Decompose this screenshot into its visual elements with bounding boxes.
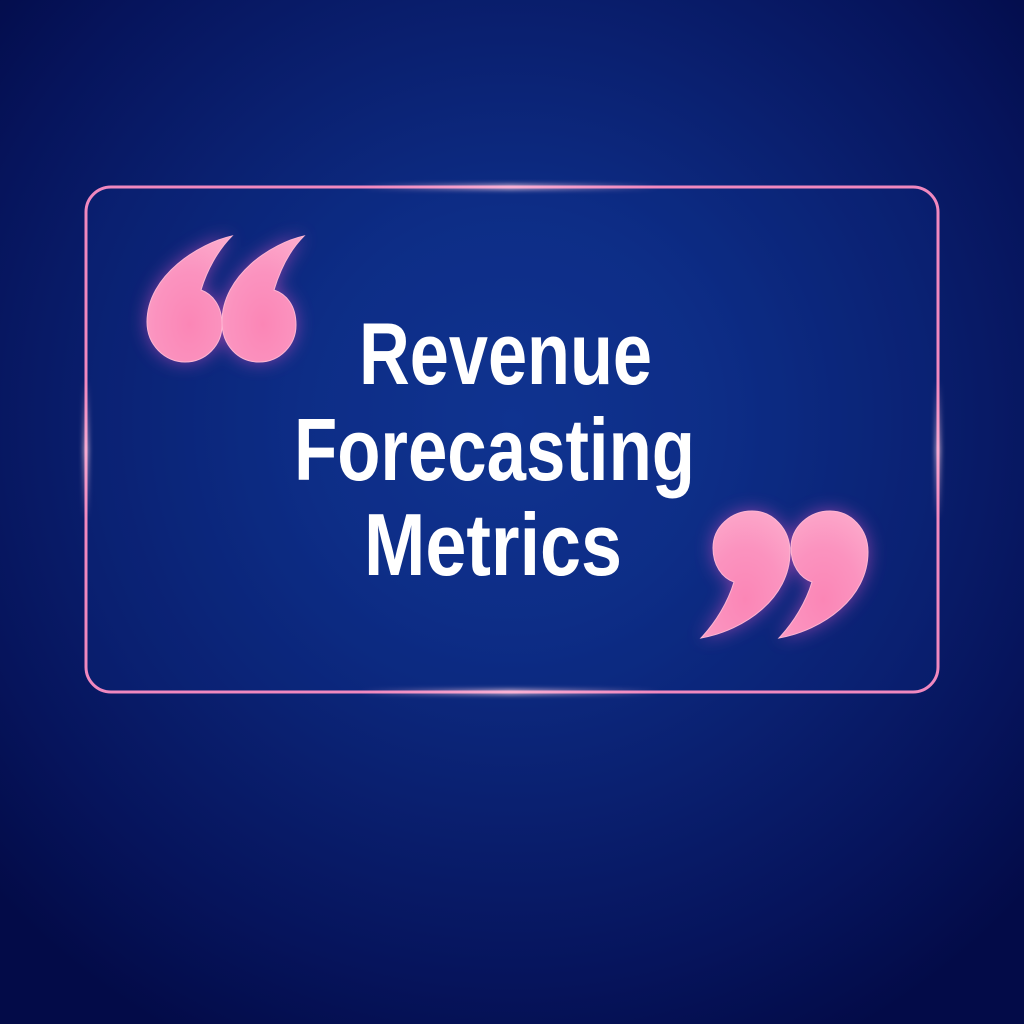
title: Metrics: [364, 495, 622, 594]
title: [294, 304, 695, 594]
icon: closing quotation mark: [701, 511, 868, 638]
title: Revenue: [359, 304, 652, 403]
panel: glowing rounded frame: [83, 184, 941, 695]
icon: opening quotation mark: [147, 236, 304, 362]
title: Forecasting: [294, 400, 695, 499]
